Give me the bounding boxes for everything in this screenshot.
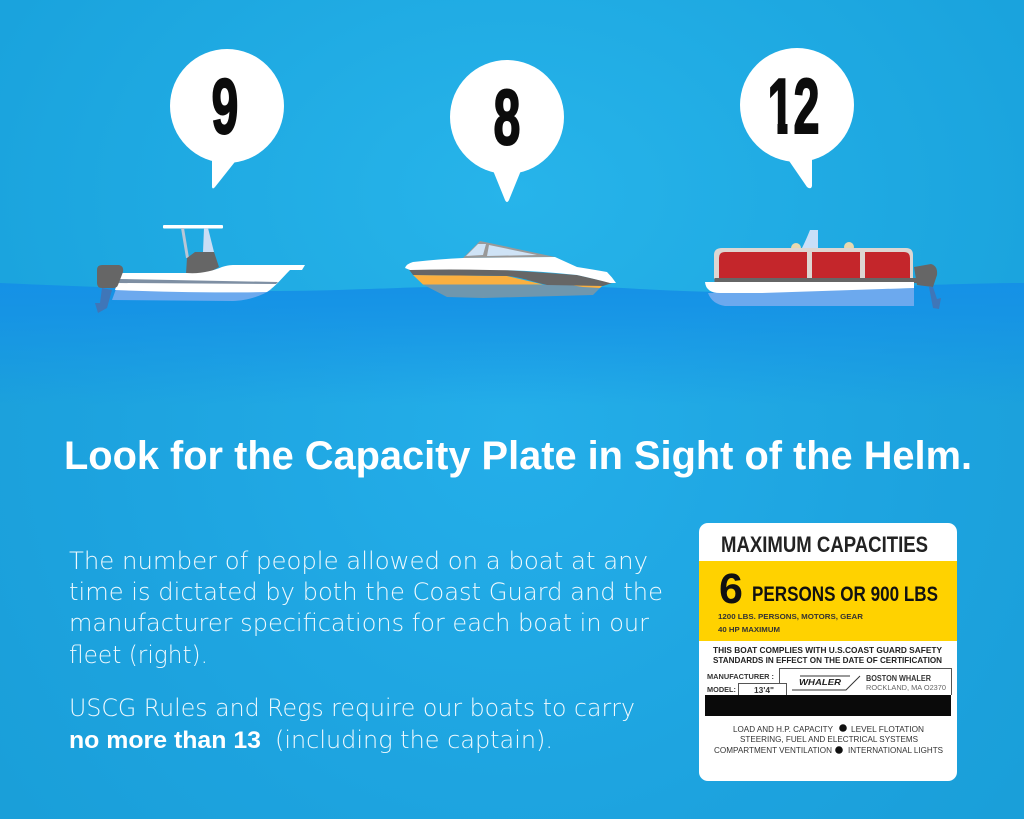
manufacturer block: [705, 668, 952, 716]
safety systems list: INTERNATIONAL LIGHTS: [848, 745, 943, 755]
yellow capacity band: 40 HP MAXIMUM: [718, 625, 780, 634]
boat: center console: [95, 225, 305, 313]
speech bubble: 9: [170, 49, 284, 188]
body paragraph 2: [69, 694, 635, 754]
speech bubble: 9: 9: [212, 62, 238, 150]
body paragraph 1: manufacturer specifications for each boat in our: [69, 609, 649, 637]
compliance statement: STANDARDS IN EFFECT ON THE DATE OF CERTIFICATION: [713, 655, 942, 665]
compliance statement: THIS BOAT COMPLIES WITH U.S.COAST GUARD SAFETY: [713, 645, 942, 655]
manufacturer block: MANUFACTURER :: [707, 672, 774, 681]
safety systems list: LOAD AND H.P. CAPACITY: [733, 724, 833, 734]
body paragraph 1: The number of people allowed on a boat at any: [69, 547, 648, 575]
body paragraph 1: time is dictated by both the Coast Guard and the: [69, 578, 663, 606]
body paragraph 1: [69, 547, 663, 669]
body paragraph 1: fleet (right).: [69, 641, 208, 669]
safety systems list: [714, 724, 943, 755]
yellow capacity band: PERSONS OR 900 LBS: [752, 583, 938, 606]
yellow capacity band: 1200 LBS. PERSONS, MOTORS, GEAR: [718, 612, 864, 621]
speech bubble: 8: 8: [494, 73, 520, 161]
body paragraph 2: USCG Rules and Regs require our boats to carry: [69, 694, 635, 722]
yellow capacity band: [699, 561, 957, 641]
compliance statement: [713, 645, 942, 665]
heading: Look for the Capacity Plate in Sight of the Helm.: [64, 434, 972, 478]
body paragraph 2: no more than 13: [69, 727, 261, 754]
manufacturer block: 13'4": [754, 686, 774, 695]
body paragraph 2: (including the captain).: [275, 726, 553, 754]
safety systems list: COMPARTMENT VENTILATION: [714, 745, 832, 755]
speech bubble: 8: [450, 60, 564, 202]
boat: pontoon: [705, 230, 941, 309]
safety systems list: STEERING, FUEL AND ELECTRICAL SYSTEMS: [740, 734, 918, 744]
background sky: [0, 0, 1024, 300]
capacity plate: [699, 523, 957, 781]
manufacturer block: MODEL:: [707, 685, 736, 694]
safety systems list: LEVEL FLOTATION: [851, 724, 924, 734]
speech bubble: 12: [740, 48, 854, 188]
yellow capacity band: 6: [719, 565, 743, 613]
water: [0, 283, 1024, 819]
manufacturer block: BOSTON WHALER: [866, 674, 931, 683]
speech bubble: 12: 12: [767, 63, 820, 150]
manufacturer block: WHALER: [799, 677, 842, 687]
boat: speedboat: [405, 241, 616, 298]
manufacturer block: ROCKLAND, MA O2370: [866, 683, 946, 692]
plate title: MAXIMUM CAPACITIES: [721, 532, 928, 557]
